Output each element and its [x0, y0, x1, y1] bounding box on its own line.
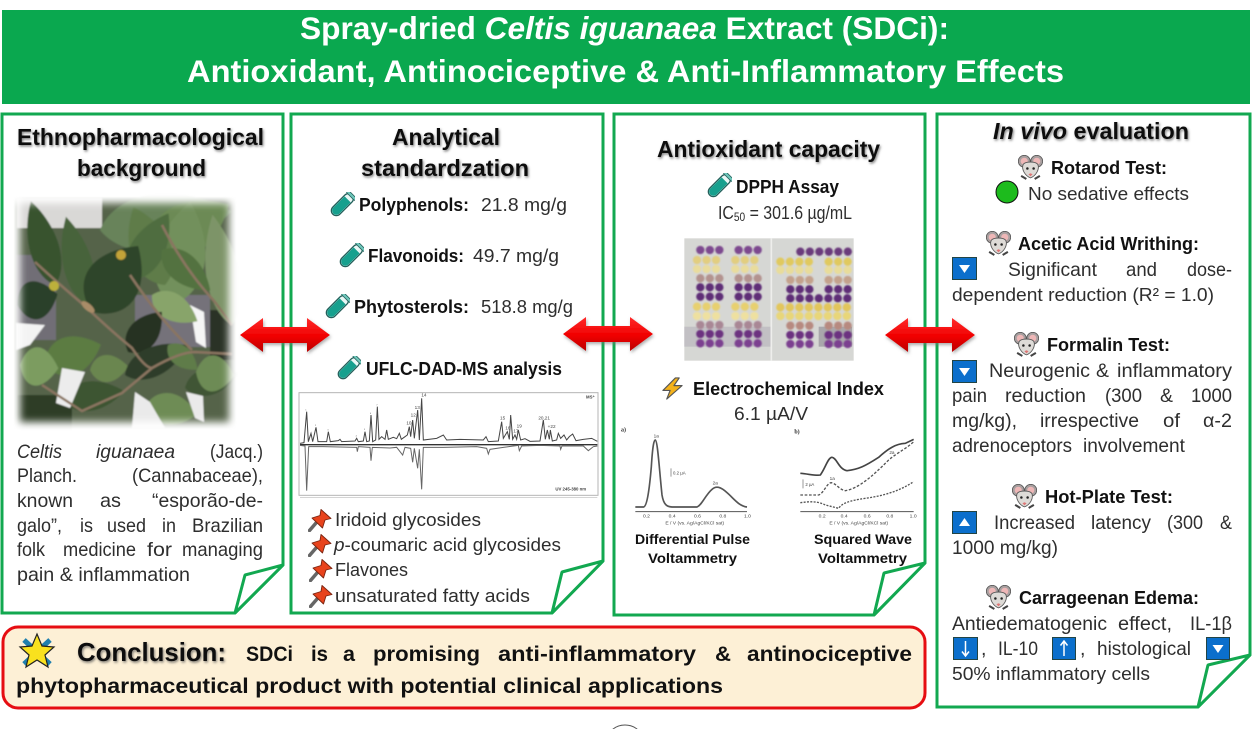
- panel: conclusion: [3, 627, 925, 708]
- text block: plant description: (Cannabaceae),: [132, 465, 263, 487]
- result: polyphenols: [329, 190, 567, 218]
- heading: analytical standardzation: standardzation: [361, 155, 529, 181]
- panel: ethnopharmacological background: [2, 114, 283, 613]
- test: carrageenan edema: IL-1β: [1190, 613, 1232, 635]
- chart: chromatogram: 14: [421, 393, 427, 398]
- text block: conclusion statement: &: [715, 642, 731, 666]
- heading: analytical standardzation: [361, 124, 529, 181]
- text block: conclusion statement: promising: [373, 642, 480, 666]
- heading: analytical standardzation: Analytical: [392, 124, 500, 150]
- chart: differential pulse voltammetry: [621, 427, 751, 527]
- test: acetic acid writhing: dependent reduction (R² = 1.0): [952, 284, 1214, 305]
- text block: plant description: pain & inflammation: [17, 564, 190, 586]
- chart: chromatogram: 6: [370, 413, 372, 415]
- test: carrageenan edema: Carrageenan Edema:: [1019, 587, 1199, 608]
- test: acetic acid writhing: dose-: [1187, 259, 1232, 281]
- panel: in vivo evaluation: [937, 114, 1250, 707]
- subheading: DPPH assay: 50: [734, 210, 745, 224]
- test: rotarod: [996, 155, 1189, 204]
- test: formalin: of: [1163, 410, 1181, 432]
- test: carrageenan edema: 50% inflammatory cells: [952, 663, 1150, 684]
- test: formalin: &: [1096, 360, 1109, 382]
- chart: differential pulse voltammetry: 1a: [654, 434, 659, 439]
- test: hot-plate: (300: [1167, 512, 1203, 534]
- text block: plant description: Planch.: [17, 465, 77, 487]
- chart: squared wave voltammetry: 0.2: [819, 513, 826, 519]
- chart: chromatogram: 17: [513, 429, 519, 434]
- text block: plant description: in: [162, 515, 176, 537]
- test: rotarod: Rotarod Test:: [1051, 157, 1167, 178]
- caption: differential pulse voltammetry: [635, 531, 750, 566]
- text block: plant description: for: [147, 539, 173, 561]
- partial circle at page bottom: [607, 725, 643, 729]
- test: formalin: α-2: [1203, 410, 1232, 432]
- test: acetic acid writhing: and: [1126, 259, 1157, 281]
- test: rotarod: No sedative effects: [1028, 183, 1189, 204]
- test: formalin: &: [1160, 385, 1173, 407]
- subheading: DPPH assay: [706, 171, 852, 224]
- test: hot-plate: [952, 484, 1232, 559]
- chart: squared wave voltammetry: 2a: [889, 450, 895, 455]
- result: polyphenols: 21.8 mg/g: [481, 194, 567, 215]
- text block: conclusion statement: anti-inflammatory: [498, 642, 696, 666]
- test: formalin: irrespective: [1040, 410, 1139, 432]
- test: carrageenan edema: ,: [1080, 638, 1085, 660]
- arrow: standardization to antioxidant: [563, 317, 653, 351]
- text block: plant description: used: [107, 515, 146, 537]
- chart: chromatogram: UV 245-380 nm: [555, 487, 586, 492]
- text block: conclusion statement: [16, 642, 912, 698]
- test: acetic acid writhing: [952, 231, 1232, 305]
- chart: chromatogram: 2: [315, 425, 316, 427]
- text block: plant description: iguanaea: [96, 441, 175, 463]
- test: carrageenan edema: effect,: [1118, 613, 1172, 635]
- test: formalin: Neurogenic: [989, 360, 1090, 382]
- chart: chromatogram: +22: [548, 424, 556, 429]
- text block: plant description: managing: [182, 539, 263, 561]
- test: carrageenan edema: Antiedematogenic: [952, 613, 1107, 635]
- arrow: antioxidant to in vivo: [885, 318, 975, 352]
- test: formalin: inflammatory: [1117, 360, 1232, 382]
- chart: squared wave voltammetry: E / V (vs. Ag/AgCl/KCl sat): [829, 521, 888, 527]
- subheading: electrochemical index: [663, 378, 885, 424]
- chart: squared wave voltammetry: 1a: [830, 476, 835, 481]
- chart: chromatogram: 12: [411, 413, 416, 418]
- chart: chromatogram: 7: [376, 404, 377, 406]
- heading: conclusion: Conclusion:: [77, 637, 226, 667]
- text block: plant description: Brazilian: [192, 515, 263, 537]
- text block: plant description: folk: [17, 539, 45, 561]
- chart: chromatogram: 4: [356, 436, 358, 438]
- test: formalin: reduction: [1005, 385, 1086, 407]
- chart: chromatogram: 13: [415, 405, 420, 410]
- test: formalin: pain: [952, 385, 987, 407]
- text block: conclusion statement: SDCi: [246, 642, 293, 666]
- chart: squared wave voltammetry: 1.0: [910, 513, 917, 519]
- subheading: electrochemical index: Electrochemical Index: [693, 378, 885, 399]
- subheading: DPPH assay: IC: [718, 202, 737, 223]
- chart: chromatogram: [299, 393, 598, 497]
- text block: conclusion statement: antinociceptive: [747, 642, 912, 666]
- caption: squared wave voltammetry: [814, 531, 912, 566]
- chart: differential pulse voltammetry: 0.6: [694, 513, 701, 519]
- text block: conclusion statement: a: [343, 642, 356, 666]
- list: compound classes: Iridoid glycosides: [335, 509, 481, 530]
- chart: differential pulse voltammetry: 0.8: [719, 513, 726, 519]
- chart: differential pulse voltammetry: 0.2: [643, 513, 650, 519]
- heading: in vivo evaluation: In vivo evaluation: [993, 118, 1189, 144]
- test: carrageenan edema: IL-10: [998, 638, 1038, 660]
- text block: plant description: known: [17, 490, 73, 512]
- chart: chromatogram: 3: [327, 430, 329, 432]
- test: hot-plate: Hot-Plate Test:: [1045, 486, 1173, 507]
- test: formalin: Formalin Test:: [1047, 334, 1170, 355]
- test: formalin: adrenoceptors: [952, 435, 1072, 457]
- chart: differential pulse voltammetry: 0.2 µA: [673, 470, 686, 475]
- chart: chromatogram: 1: [305, 410, 306, 412]
- text block: plant description: (Jacq.): [210, 441, 263, 463]
- subheading: electrochemical index: 6.1 µA/V: [734, 403, 808, 424]
- result: phytosterols: 518.8 mg/g: [481, 296, 573, 317]
- text block: plant description: “esporão-de-: [152, 490, 263, 512]
- text block: plant description: medicine: [63, 539, 136, 561]
- chart: differential pulse voltammetry: a): [621, 427, 626, 434]
- test: formalin: involvement: [1083, 435, 1186, 457]
- chart: squared wave voltammetry: b): [794, 428, 800, 435]
- text block: conclusion statement: phytopharmaceutical product with potential clinical applications: [16, 674, 723, 698]
- title line 1: Spray-dried Celtis iguanaea Extract (SDCi):: [300, 10, 949, 46]
- result: phytosterols: Phytosterols:: [354, 296, 469, 317]
- text block: plant description: is: [80, 515, 93, 537]
- result: flavonoids: Flavonoids:: [368, 245, 464, 266]
- icon: star: [20, 634, 54, 667]
- text block: plant description: as: [100, 490, 121, 512]
- subheading: UFLC-DAD-MS analysis: [336, 354, 562, 381]
- caption: differential pulse voltammetry: Voltammetry: [648, 550, 737, 566]
- panel: analytical standardization: [291, 114, 603, 613]
- arrow: background to standardization: [240, 318, 330, 352]
- test: hot-plate: latency: [1091, 512, 1151, 534]
- icon: pushpin: [310, 510, 331, 530]
- test: carrageenan edema: histological: [1097, 638, 1191, 660]
- chart: squared wave voltammetry: [794, 428, 917, 527]
- photo: DPPH microplates: [684, 238, 854, 361]
- chart: squared wave voltammetry: 0.6: [864, 513, 871, 519]
- chart: chromatogram: 10: [406, 421, 412, 426]
- chart: differential pulse voltammetry: 1.0: [744, 513, 751, 519]
- heading: ethnopharmacological background: Ethnopharmacological: [17, 124, 264, 150]
- caption: squared wave voltammetry: Voltammetry: [818, 550, 907, 566]
- chart: chromatogram: 5: [364, 429, 366, 431]
- chart: chromatogram: 15: [500, 416, 506, 421]
- chart: squared wave voltammetry: 2 µA: [805, 482, 814, 487]
- panel: antioxidant capacity: [614, 114, 925, 615]
- test: formalin: mg/kg),: [952, 410, 1017, 432]
- test: formalin: (300: [1105, 385, 1142, 407]
- chart: chromatogram: MS⁺: [586, 395, 595, 400]
- title banner: [2, 10, 1250, 104]
- list: compound classes: unsaturated fatty acids: [335, 585, 530, 606]
- caption: squared wave voltammetry: Squared Wave: [814, 531, 912, 547]
- test: hot-plate: &: [1220, 512, 1232, 534]
- chart: differential pulse voltammetry: E / V (vs. Ag/AgCl/KCl sat): [665, 521, 724, 527]
- subheading: DPPH assay: DPPH Assay: [736, 176, 840, 197]
- heading: ethnopharmacological background: background: [77, 155, 206, 181]
- text block: plant description: Celtis: [17, 441, 62, 463]
- text block: conclusion statement: is: [311, 642, 328, 666]
- heading: antioxidant capacity: Antioxidant capacity: [657, 136, 880, 162]
- list: compound classes: [310, 509, 561, 606]
- photo: Celtis iguanaea leaves and branches: [14, 197, 236, 428]
- test: hot-plate: 1000 mg/kg): [952, 537, 1058, 559]
- test: carrageenan edema: ,: [981, 638, 986, 660]
- test: hot-plate: Increased: [994, 512, 1075, 534]
- list: compound classes: p-coumaric acid glycosides: [333, 534, 561, 555]
- text block: plant description: galo”,: [17, 515, 62, 537]
- chart: chromatogram: 20,21: [538, 416, 550, 421]
- test: acetic acid writhing: Significant: [1008, 259, 1098, 281]
- chart: chromatogram: 16: [505, 425, 511, 430]
- test: acetic acid writhing: Acetic Acid Writhing:: [1018, 233, 1199, 254]
- result: flavonoids: [338, 241, 559, 269]
- result: phytosterols: [324, 292, 573, 320]
- test: carrageenan edema: [952, 585, 1232, 684]
- test: formalin: 1000: [1191, 385, 1232, 407]
- result: polyphenols: Polyphenols:: [359, 194, 469, 215]
- chart: squared wave voltammetry: 0.4: [841, 513, 848, 519]
- chart: differential pulse voltammetry: 0.4: [669, 513, 676, 519]
- chart: chromatogram: 19: [517, 423, 522, 428]
- result: flavonoids: 49.7 mg/g: [473, 245, 559, 266]
- heading: ethnopharmacological background: [17, 124, 264, 181]
- title line 2: Antioxidant, Antinociceptive & Anti-Inflammatory Effects: [187, 53, 1064, 89]
- test: formalin: [952, 332, 1232, 457]
- chart: differential pulse voltammetry: 2a: [713, 480, 718, 485]
- subheading: DPPH assay: = 301.6 µg/mL: [745, 202, 852, 223]
- subheading: UFLC-DAD-MS analysis: UFLC-DAD-MS analysis: [366, 358, 562, 379]
- list: compound classes: Flavones: [335, 559, 408, 580]
- caption: differential pulse voltammetry: Differential Pulse: [635, 531, 750, 547]
- chart: squared wave voltammetry: 0.8: [886, 513, 893, 519]
